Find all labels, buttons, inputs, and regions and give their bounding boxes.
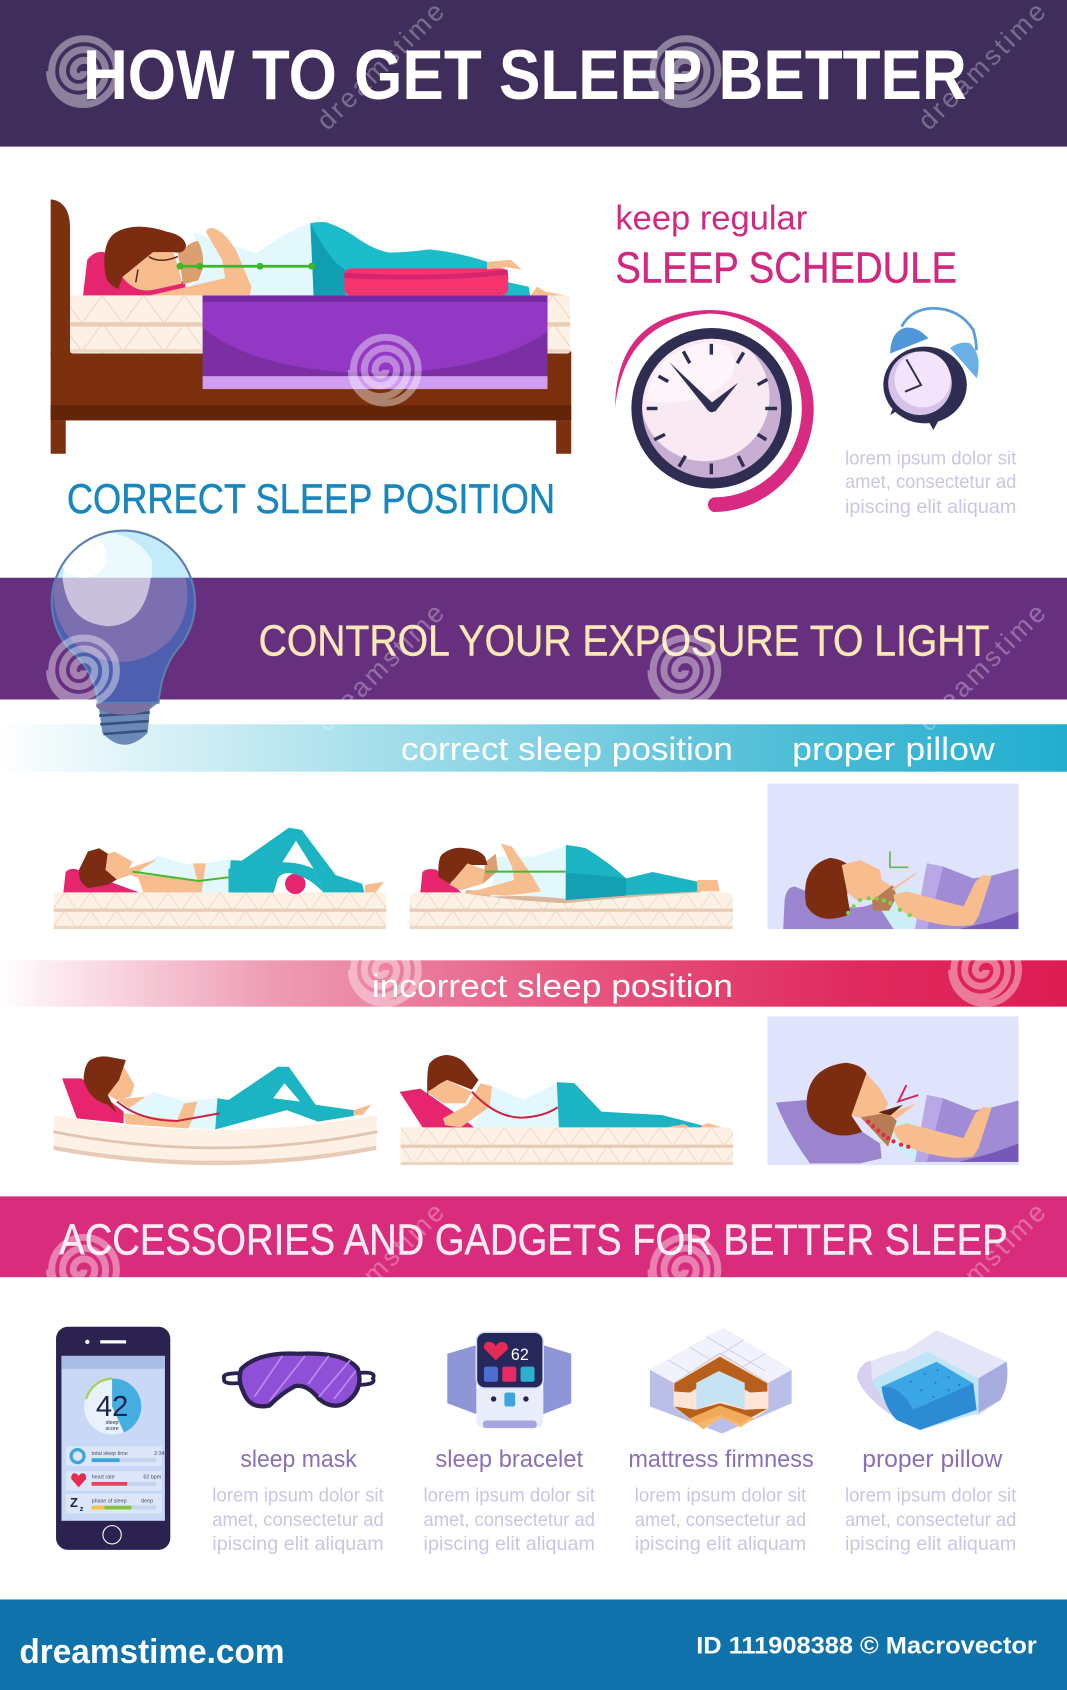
woman figure <box>104 222 565 295</box>
stat card: phase of sleep: deep <box>141 1498 153 1504</box>
text block: schedule lorem <box>845 448 1017 518</box>
title: HOW TO GET SLEEP BETTER <box>83 36 967 114</box>
icon: memory foam pillow <box>857 1330 1007 1430</box>
banner: control exposure to light <box>0 578 1067 699</box>
item: proper pillow <box>845 1330 1017 1555</box>
figure: correct back sleep on mattress <box>54 828 386 929</box>
heading: sleep schedule: SLEEP SCHEDULE <box>615 244 957 292</box>
watermark overlay: dreamstime <box>912 598 1051 737</box>
item: proper pillow: proper pillow <box>862 1447 1003 1473</box>
sleep score dial <box>84 1378 141 1435</box>
sleep score dial: score <box>106 1426 119 1432</box>
stat card: heart rate: 62 bpm <box>143 1475 162 1481</box>
item: mattress firmness: ipiscing elit aliquam <box>635 1533 806 1555</box>
watermark overlay: dreamstime <box>912 0 1051 136</box>
text block: schedule lorem: lorem ipsum dolor sit <box>845 448 1017 470</box>
band: correct sleep position and proper pillow: correct sleep position <box>401 731 733 767</box>
item: sleep mask: lorem ipsum dolor sit <box>212 1484 384 1506</box>
icon: sleep bracelet <box>447 1332 571 1428</box>
stat card: total sleep time <box>66 1446 165 1466</box>
watermark overlay: dreamstime <box>311 1197 450 1336</box>
banner: control exposure to light: CONTROL YOUR EXPOSURE TO LIGHT <box>259 617 989 665</box>
icon: light bulb <box>50 530 196 745</box>
sleep score dial: sleep <box>106 1420 119 1426</box>
item: proper pillow: amet, consectetur ad <box>845 1509 1016 1531</box>
blanket <box>203 295 548 389</box>
stat card: phase of sleep: Z <box>70 1495 78 1510</box>
headboard and bed frame <box>51 199 571 454</box>
header banner <box>0 0 1067 147</box>
item: sleep bracelet: lorem ipsum dolor sit <box>424 1484 596 1506</box>
item: mattress firmness: mattress firmness <box>628 1447 814 1473</box>
row: correct positions <box>54 784 1019 929</box>
mattress <box>70 295 570 354</box>
text block: schedule lorem: amet, consectetur ad <box>845 471 1016 493</box>
item: sleep mask <box>212 1353 384 1555</box>
item: mattress firmness <box>628 1328 814 1555</box>
banner: accessories and gadgets <box>0 1196 1067 1277</box>
icon: sleep mask <box>224 1353 374 1406</box>
panel: wrong pillow <box>767 1016 1018 1165</box>
watermark overlay <box>50 0 1051 1336</box>
figure: incorrect back sleep on soft mattress <box>54 1056 377 1165</box>
illustration: woman sleeping on bed <box>51 199 571 454</box>
heading: sleep schedule: keep regular <box>615 200 807 238</box>
item: sleep bracelet: amet, consectetur ad <box>424 1509 595 1531</box>
item: proper pillow: lorem ipsum dolor sit <box>845 1484 1017 1506</box>
row: incorrect positions <box>54 1016 1019 1165</box>
stat card: phase of sleep: z <box>80 1504 84 1513</box>
watermark overlay: dreamstime <box>311 598 450 737</box>
figure: incorrect side sleep <box>400 1055 733 1165</box>
text block: schedule lorem: ipiscing elit aliquam <box>845 496 1016 518</box>
item: sleep mask: ipiscing elit aliquam <box>212 1533 384 1555</box>
item: sleep bracelet: sleep bracelet <box>435 1447 583 1473</box>
footer bar: dreamstime.com <box>19 1633 285 1671</box>
item: proper pillow: ipiscing elit aliquam <box>845 1533 1016 1555</box>
pillow <box>83 252 185 295</box>
stat card: heart rate: heart rate <box>92 1475 115 1481</box>
item: sleep bracelet <box>424 1332 596 1555</box>
stat card: total sleep time: 2:34 <box>154 1451 165 1457</box>
figure: correct side sleep on mattress <box>410 843 733 929</box>
stat card: heart rate <box>66 1471 162 1491</box>
band: correct sleep position and proper pillow <box>0 724 1067 772</box>
item: sleep bracelet: ipiscing elit aliquam <box>424 1533 595 1555</box>
icon: wall clock with pink arc <box>615 310 814 512</box>
item: sleep mask: sleep mask <box>240 1447 357 1473</box>
stat card: phase of sleep: phase of sleep <box>92 1498 127 1504</box>
watermark overlay: dreamstime <box>912 1197 1051 1336</box>
icon: phone with sleep score app <box>56 1327 170 1550</box>
footer bar: ID 111908388 © Macrovector <box>696 1633 1037 1659</box>
panel: proper pillow <box>767 784 1018 929</box>
icon: sleep bracelet: 62 <box>511 1346 529 1364</box>
icon: alarm clock <box>883 308 979 430</box>
watermark overlay: dreamstime <box>311 0 450 136</box>
spine alignment line <box>177 263 315 270</box>
icon: mattress cutaway <box>650 1328 792 1433</box>
band: correct sleep position and proper pillow: proper pillow <box>792 731 995 767</box>
footer bar <box>0 1599 1067 1690</box>
caption: correct sleep position: CORRECT SLEEP POSITION <box>67 475 555 522</box>
stat card: total sleep time: total sleep time <box>92 1451 128 1457</box>
item: mattress firmness: lorem ipsum dolor sit <box>635 1484 807 1506</box>
sleep score dial: 42 <box>96 1391 128 1423</box>
item: sleep mask: amet, consectetur ad <box>212 1509 384 1531</box>
band: incorrect sleep position <box>0 960 1067 1007</box>
band: incorrect sleep position: incorrect sleep position <box>372 968 733 1004</box>
heading: sleep schedule <box>615 200 957 292</box>
item: mattress firmness: amet, consectetur ad <box>635 1509 806 1531</box>
stat card: phase of sleep <box>66 1494 162 1513</box>
